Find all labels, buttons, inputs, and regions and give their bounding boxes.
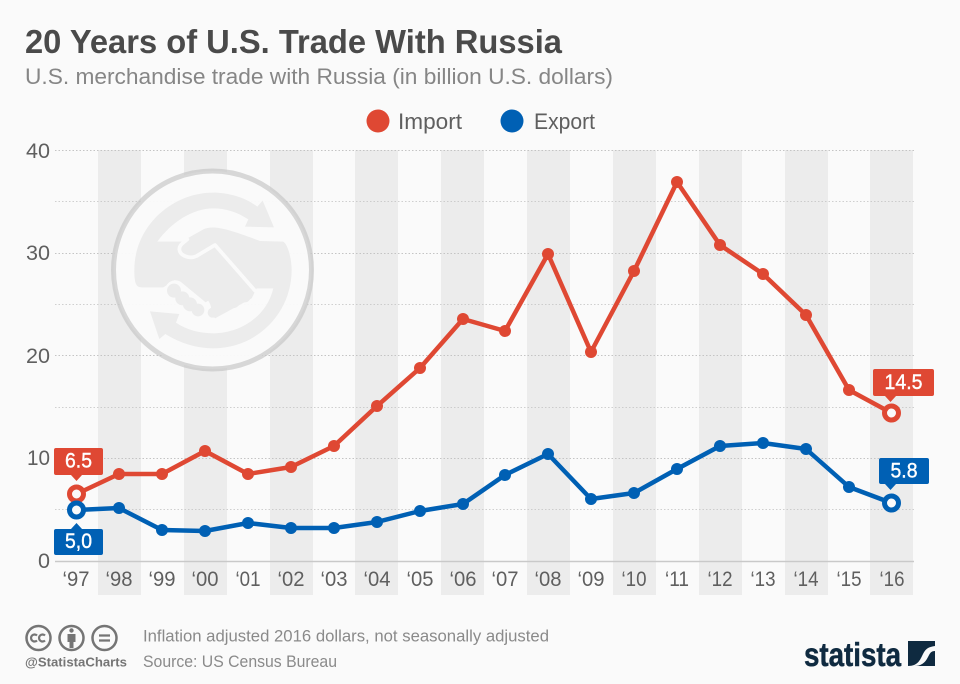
export line xyxy=(70,437,898,537)
legend: import xyxy=(366,109,462,134)
y axis labels: 40 xyxy=(26,140,50,163)
callout: import 1997: 6.5 xyxy=(65,450,92,472)
callout: import 2016 xyxy=(873,369,934,402)
source: Source: US Census Bureau xyxy=(143,653,337,671)
x axis labels: ‘00 xyxy=(192,568,218,591)
x axis labels: ‘13 xyxy=(750,568,776,591)
callout: export 1997 xyxy=(54,523,103,555)
subtitle: U.S. merchandise trade with Russia (in billion U.S. dollars) xyxy=(25,64,613,89)
statista logo: statista xyxy=(804,636,902,673)
callout: export 2016 xyxy=(879,458,929,490)
x axis labels: ‘10 xyxy=(622,568,646,591)
x axis labels: ‘14 xyxy=(794,568,819,591)
y axis labels xyxy=(26,140,50,573)
note: Inflation adjusted 2016 dollars, not seasonally adjusted xyxy=(143,628,549,646)
x axis labels: ‘99 xyxy=(148,568,176,591)
import line xyxy=(70,176,898,501)
x axis labels: ‘03 xyxy=(320,568,348,591)
x axis labels: ‘02 xyxy=(278,568,304,591)
legend: import: Import xyxy=(398,109,462,134)
callout: export 1997: 5,0 xyxy=(65,530,92,553)
handle: @StatistaCharts xyxy=(25,654,127,670)
x axis labels: ‘01 xyxy=(236,568,260,591)
y axis labels: 20 xyxy=(26,345,50,368)
x axis labels: ‘04 xyxy=(364,568,391,591)
x axis labels xyxy=(62,568,904,591)
year bands xyxy=(98,150,913,595)
legend xyxy=(366,109,595,134)
callout: export 2016: 5.8 xyxy=(890,460,918,482)
x axis labels: ‘08 xyxy=(534,568,562,591)
icon: handshake watermark xyxy=(114,171,312,369)
callout: import 2016: 14.5 xyxy=(884,371,922,394)
x axis labels: ‘06 xyxy=(450,568,476,591)
x axis labels: ‘07 xyxy=(492,568,518,591)
callout: import 1997 xyxy=(54,448,103,481)
legend: export xyxy=(500,109,595,134)
y axis labels: 0 xyxy=(38,550,50,573)
x axis labels: ‘15 xyxy=(836,568,862,591)
x axis labels: ‘05 xyxy=(406,568,434,591)
x axis labels: ‘97 xyxy=(62,568,90,591)
icon: creative commons xyxy=(26,626,116,650)
baseline xyxy=(55,560,914,562)
y axis labels: 10 xyxy=(27,447,50,470)
x axis labels: ‘16 xyxy=(880,568,904,591)
legend: export: Export xyxy=(534,109,595,134)
x axis labels: ‘09 xyxy=(578,568,604,591)
x axis labels: ‘11 xyxy=(665,568,689,591)
title: 20 Years of U.S. Trade With Russia xyxy=(25,23,563,60)
y axis labels: 30 xyxy=(26,242,50,265)
x axis labels: ‘12 xyxy=(708,568,732,591)
x axis labels: ‘98 xyxy=(106,568,132,591)
